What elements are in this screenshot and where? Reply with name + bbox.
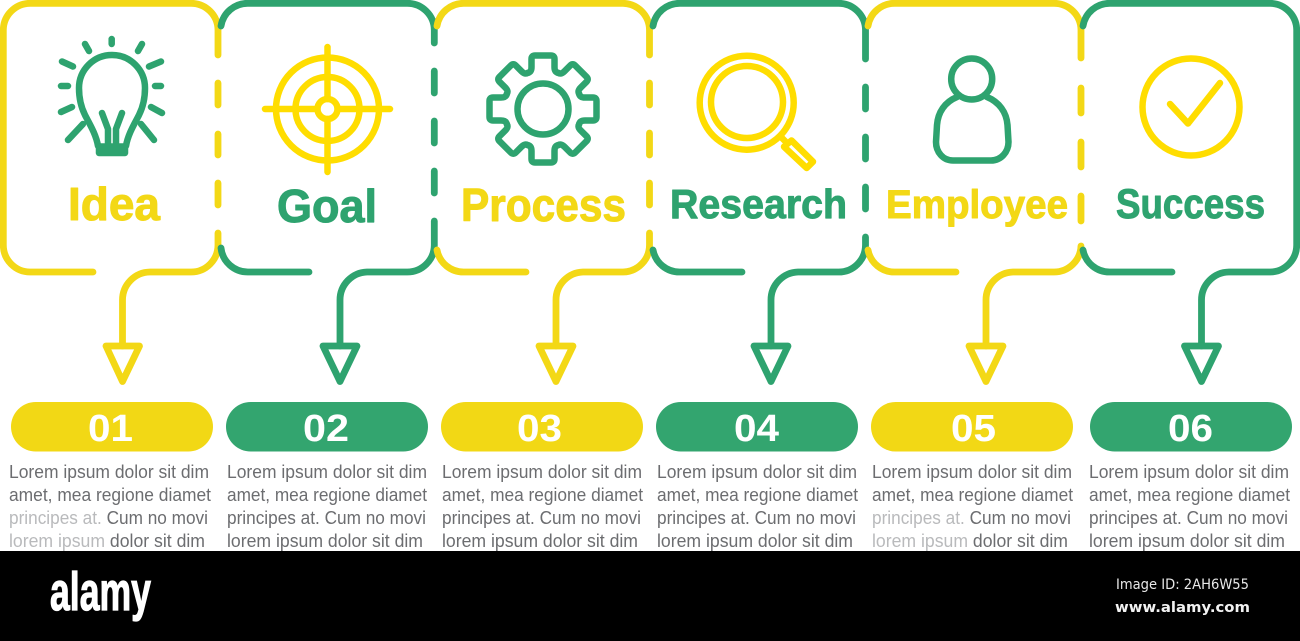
text block: step 3: Lorem ipsum dolor sit dim [442,462,642,482]
text block: step 5: amet, mea regione diamet [872,485,1073,505]
text block: step 4 [657,462,858,551]
text block: step 1: lorem ipsum dolor sit dim [9,531,205,551]
pill: 06 [1090,402,1292,452]
icon: person [936,58,1008,160]
text block: step 1: amet, mea regione diamet [9,485,211,505]
icon: light bulb [61,39,162,153]
pill: 04 [656,402,858,452]
heading: Employee: Employee [886,183,1068,227]
text block: step 3: amet, mea regione diamet [442,485,643,505]
text block: step 4: Lorem ipsum dolor sit dim [657,462,857,482]
heading: Research: Research [670,181,847,227]
text block: step 2 [227,462,427,551]
step 5 outline and arrow: yellow [868,3,1081,382]
pill: 04: 04 [734,408,779,450]
pill: 06: 06 [1168,408,1213,450]
image id: Image ID: 2AH6W55 [1116,577,1249,593]
pill: 01: 01 [88,408,133,450]
heading: Success: Success [1116,180,1265,227]
text block: step 5 [872,462,1073,551]
pill: 01 [11,402,213,452]
text block: step 5: principes at. Cum no movi [872,508,1071,528]
heading: Goal: Goal [277,180,377,232]
pill: 03 [441,402,643,452]
text block: step 3: principes at. Cum no movi [442,508,641,528]
icon: check mark circle [1142,58,1240,156]
text block: step 6: lorem ipsum dolor sit dim [1089,531,1285,551]
pill: 02 [226,402,428,452]
text block: step 4: lorem ipsum dolor sit dim [657,531,853,551]
pill: 05 [871,402,1073,452]
pill: 03: 03 [517,408,562,450]
text block: step 4: amet, mea regione diamet [657,485,858,505]
text block: step 3: lorem ipsum dolor sit dim [442,531,638,551]
text block: step 5: Lorem ipsum dolor sit dim [872,462,1072,482]
step 3 outline and arrow: yellow [437,3,650,382]
text block: step 6: amet, mea regione diamet [1089,485,1290,505]
text block: step 5: lorem ipsum dolor sit dim [872,531,1068,551]
text block: step 3 [442,462,643,551]
step 1 outline and arrow: yellow [3,3,218,382]
text block: step 4: principes at. Cum no movi [657,508,856,528]
text block: step 6 [1089,462,1290,551]
heading: Idea: Idea [68,178,160,230]
text block: step 6: Lorem ipsum dolor sit dim [1089,462,1289,482]
text block: step 1: principes at. Cum no movi [9,508,208,528]
pill: 05: 05 [951,408,996,450]
icon: target [265,47,390,172]
icon: magnifying glass [700,56,813,168]
text block: step 1 [9,462,211,551]
text block: step 2: lorem ipsum dolor sit dim [227,531,423,551]
heading: Process: Process [461,179,626,231]
text block: step 2: principes at. Cum no movi [227,508,426,528]
pill: 02: 02 [303,408,349,450]
step 4 outline and arrow: green [653,3,866,381]
logo: alamy: alamy [50,562,151,622]
text block: step 2: Lorem ipsum dolor sit dim [227,462,427,482]
text block: step 2: amet, mea regione diamet [227,485,427,505]
step 6 outline and arrow: green [1083,3,1297,382]
icon: gear [490,56,596,162]
website: www.alamy.com [1115,600,1250,616]
text block: step 6: principes at. Cum no movi [1089,508,1288,528]
step 2 outline and arrow: green [221,3,434,381]
text block: step 1: Lorem ipsum dolor sit dim [9,462,209,482]
footer band [0,551,1300,641]
